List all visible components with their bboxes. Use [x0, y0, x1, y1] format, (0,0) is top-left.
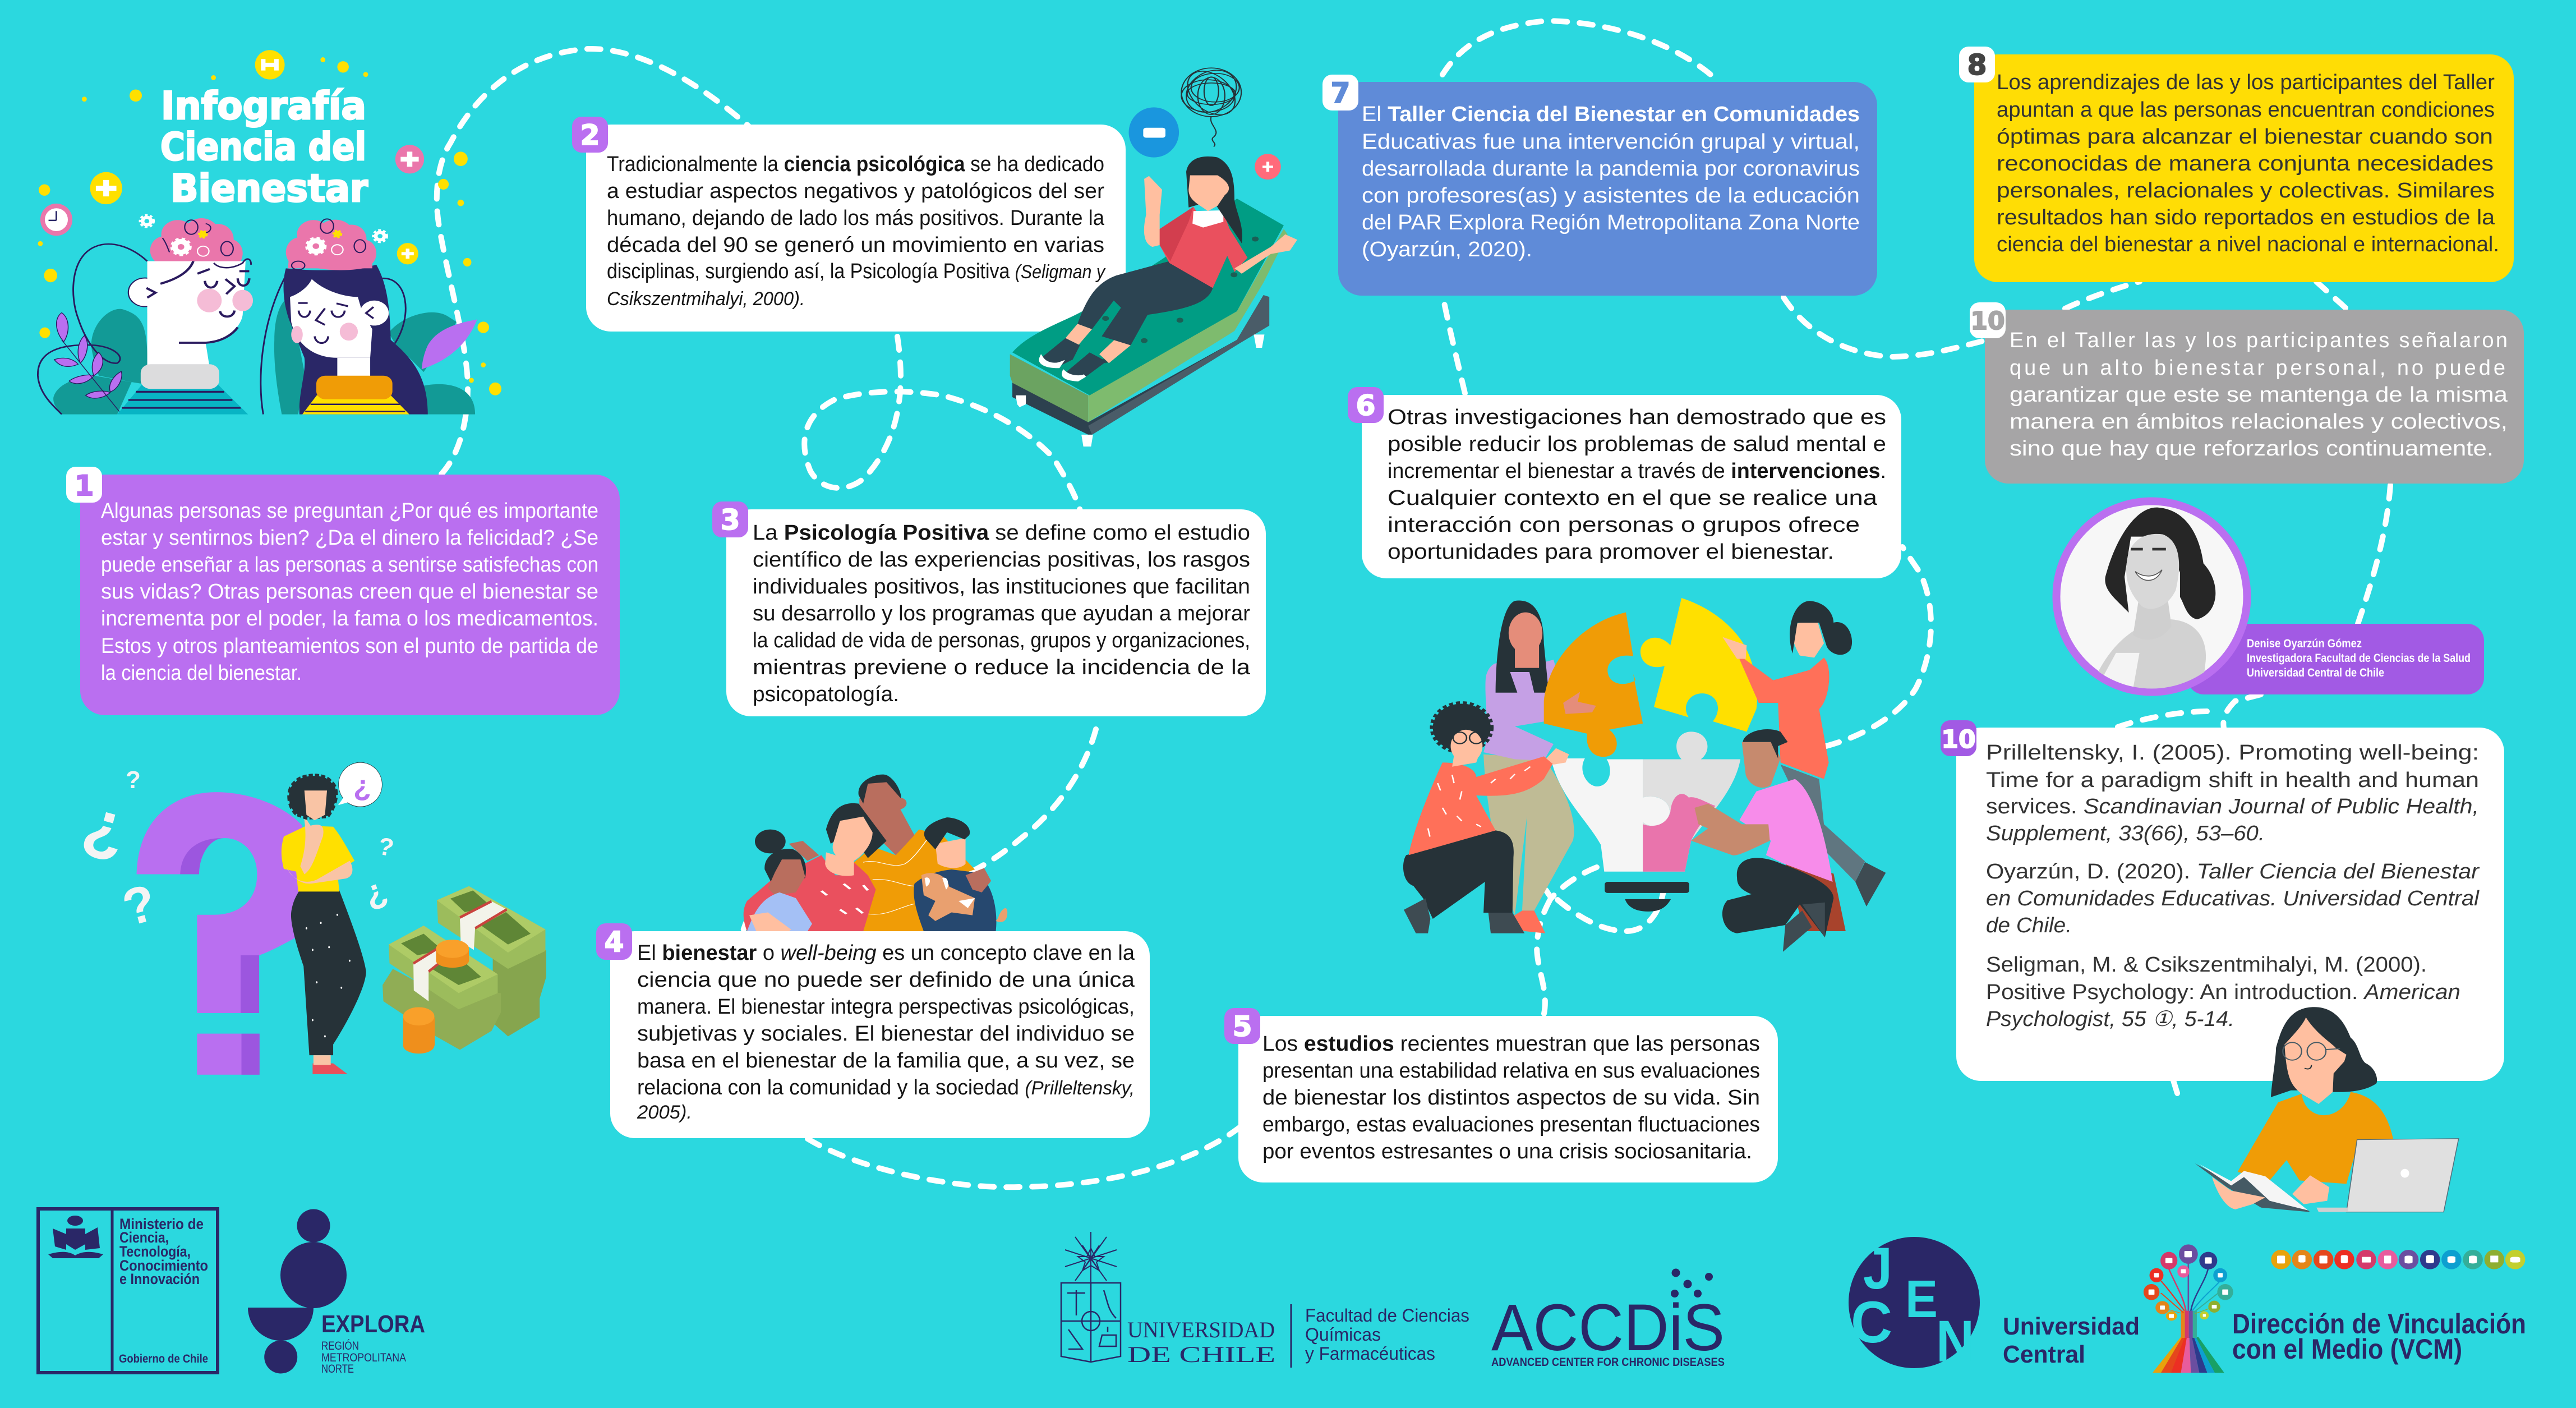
badge 1 — [66, 467, 102, 503]
text: references: Prilleltensky, I. (2005). Promoting well-being: — [1986, 741, 2479, 765]
panel 5: estudios — [1224, 1008, 1778, 1182]
white question marks: ? — [376, 832, 396, 862]
hand on orange piece — [1563, 692, 1596, 714]
reclining woman — [1041, 157, 1297, 380]
text: aprendizajes: personales, relacionales y colectivas. Similares — [1997, 179, 2495, 203]
purple plant — [54, 312, 122, 411]
icon: small yellow plus — [397, 243, 418, 264]
text: universidad de chile: UNIVERSIDAD — [1127, 1317, 1275, 1342]
text: taller: (Oyarzún, 2020). — [1362, 238, 1532, 261]
panel 7: taller — [1322, 75, 1877, 296]
text: facultad: Químicas — [1305, 1324, 1381, 1345]
white question marks: ¿ — [77, 784, 136, 867]
white question marks — [77, 766, 396, 937]
text: aprendizajes: ciencia del bienestar a nivel nacional e internacional. — [1997, 233, 2499, 256]
badge 7: 7 — [1331, 77, 1350, 109]
text: ciencia psicológica — [607, 153, 1106, 310]
UCEN letters — [1851, 1236, 1974, 1374]
white question marks: ? — [117, 874, 162, 937]
text: facultad: Facultad de Ciencias — [1305, 1305, 1469, 1326]
text: bienestar: ciencia que no puede ser definido de una única — [637, 968, 1135, 992]
text: psicología positiva — [753, 521, 1251, 706]
text: ciencia psicológica: década del 90 se generó un movimiento en varias — [607, 233, 1104, 257]
badge 8: 8 — [1967, 49, 1987, 81]
decorative yellow dots — [38, 57, 501, 395]
text: aprendizajes: apuntan a que las personas encuentran condiciones — [1997, 98, 2495, 122]
text: aprendizajes: Los aprendizajes de las y los participantes del Taller — [1997, 71, 2495, 94]
text: intro: incrementa por el poder, la fama o los medicamentos. — [101, 607, 598, 631]
text: ministerio: e Innovación — [119, 1271, 200, 1287]
badge 3: 3 — [721, 504, 740, 536]
text: bienestar personal: que un alto bienestar personal, no puede — [2010, 356, 2505, 380]
text: psicología positiva: La Psicología Positiva se define como el estudio — [753, 521, 1250, 545]
text: references: Positive Psychology: An introduction. American — [1986, 981, 2460, 1004]
panel 2: ciencia psicológica — [572, 117, 1126, 332]
speech bubble — [338, 762, 382, 807]
badge 7 — [1322, 75, 1358, 111]
badge 4: 4 — [605, 926, 624, 958]
woman figure — [284, 219, 428, 415]
text: references: Supplement, 33(66), 53–60. — [1986, 822, 2265, 845]
son with dog — [914, 817, 1007, 931]
title: Ciencia del — [160, 125, 366, 169]
mother — [744, 803, 887, 931]
woman in coral — [1722, 601, 1886, 907]
logo: Explora — [248, 1209, 425, 1375]
illustration: woman reading with laptop — [2195, 1007, 2459, 1212]
author tag — [2187, 624, 2484, 694]
logo: Universidad Central: Central — [2003, 1341, 2085, 1368]
text: universidad de chile — [1127, 1317, 1275, 1367]
logo: Universidad Central: Universidad — [2003, 1313, 2140, 1340]
text: ministerio: Ciencia, — [119, 1229, 169, 1246]
text: intervenciones: oportunidades para promover el bienestar. — [1388, 540, 1834, 564]
text: intervenciones: Otras investigaciones han demostrado que es — [1388, 406, 1886, 429]
crouching person right — [1691, 729, 1846, 952]
standing woman in purple — [1483, 601, 1595, 933]
coat of arms — [48, 1216, 103, 1258]
text: intro: Estos y otros planteamientos son el punto de partida de — [101, 634, 598, 658]
text: estudios — [1262, 1032, 1760, 1163]
text: aprendizajes: reconocidas de manera conjunta necesidades — [1997, 152, 2494, 176]
badge 9 labelled 10: 10 — [1970, 307, 2005, 335]
text: bienestar: basa en el bienestar de la familia que, a su vez, se — [637, 1049, 1135, 1073]
badge 8 — [1959, 47, 1995, 82]
text: ministerio: Conocimiento — [119, 1257, 208, 1274]
text: references: en Comunidades Educativas. Universidad Central — [1986, 887, 2480, 910]
text: psicología positiva: psicopatología. — [753, 683, 899, 706]
plus icon — [1255, 154, 1281, 180]
logo: Explora: REGIÓN — [321, 1340, 359, 1352]
text: ciencia psicológica: a estudiar aspectos negativos y patológicos del ser — [607, 180, 1104, 203]
icon: white gears — [141, 216, 386, 242]
text: psicología positiva: científico de las experiencias positivas, los rasgos — [753, 548, 1250, 572]
UCEN letters: E — [1905, 1269, 1938, 1329]
tree trunk fan — [2153, 1311, 2224, 1373]
author tag: Universidad Central de Chile — [2247, 666, 2384, 679]
big question mark — [136, 792, 302, 1075]
text: bienestar personal: sino que hay que reforzarlos continuamente. — [2010, 437, 2494, 461]
author tag: Denise Oyarzún Gómez — [2247, 637, 2362, 650]
text: references: Psychologist, 55 ①, 5-14. — [1986, 1007, 2234, 1031]
text: aprendizajes — [1997, 71, 2499, 256]
text: taller: con profesores(as) y asistentes de la educación — [1362, 184, 1860, 208]
icon: yellow badge top — [255, 50, 285, 80]
text: intro: puede enseñar a las personas a sentirse satisfechas con — [101, 553, 598, 577]
text: intervenciones: incrementar el bienestar a través de intervenciones. — [1388, 459, 1886, 483]
text: intro: la ciencia del bienestar. — [101, 661, 302, 685]
title: Bienestar — [170, 167, 368, 211]
logo: Universidad Central — [1849, 1236, 2140, 1374]
UCEN letters: C — [1851, 1290, 1892, 1355]
UCEN letters: J — [1863, 1236, 1892, 1301]
panel 8: aprendizajes — [1959, 47, 2514, 282]
badge 3 — [712, 501, 748, 537]
text: intro: sus vidas? Otras personas creen que el bienestar se — [101, 580, 598, 604]
text: taller: desarrollada durante la pandemia por coronavirus — [1362, 157, 1860, 181]
lightbulb base — [1605, 882, 1689, 912]
thin navy outline curves — [38, 244, 405, 415]
white question marks: ¿ — [358, 870, 391, 914]
text: bienestar — [637, 941, 1135, 1123]
scribble thought — [1176, 63, 1246, 146]
text: bienestar: subjetivas y sociales. El bienestar del individuo se — [637, 1022, 1135, 1046]
badge 6: 6 — [1356, 389, 1375, 422]
lightbulb left half — [1551, 758, 1670, 872]
badge 5: 5 — [1233, 1010, 1252, 1043]
panel 10: references — [1941, 720, 2504, 1081]
illustration: question mark, thinking person and money — [136, 762, 546, 1075]
text: references: de Chile. — [1986, 914, 2072, 937]
text: taller: El Taller Ciencia del Bienestar en Comunidades — [1362, 103, 1860, 126]
panel 9: bienestar personal — [1970, 302, 2524, 484]
panel 4: bienestar — [596, 923, 1150, 1138]
badge references 10: 10 — [1941, 725, 1976, 754]
icon: yellow plus — [90, 172, 122, 204]
text: estudios: presentan una estabilidad relativa en sus evaluaciones — [1262, 1059, 1760, 1083]
illustration: title figures with brains — [38, 50, 501, 415]
logo: VCM tree — [2144, 1244, 2525, 1373]
text: facultad — [1305, 1305, 1469, 1364]
panel 1: intro — [66, 467, 620, 715]
badge 5 — [1224, 1008, 1260, 1044]
dashed connector path — [437, 21, 2390, 1187]
text: intro — [101, 499, 598, 685]
logo: Universidad de Chile — [1061, 1232, 1469, 1368]
text: intervenciones: Cualquier contexto en el que se realice una — [1388, 486, 1878, 510]
text: references: Seligman, M. & Csikszentmihalyi, M. (2000). — [1986, 953, 2427, 977]
tree icon bubbles — [2144, 1244, 2233, 1320]
text: intervenciones: posible reducir los problemas de salud mental e — [1388, 432, 1886, 456]
text: bienestar: El bienestar o well-being es un concepto clave en la — [637, 941, 1135, 965]
text: universidad de chile: DE CHILE — [1127, 1342, 1275, 1367]
logo: ACCDiS: ADVANCED CENTER FOR CHRONIC DISEASES — [1491, 1356, 1725, 1369]
laptop — [2316, 1139, 2459, 1212]
text: psicología positiva: su desarrollo y los programas que ayudan a mejorar — [753, 602, 1250, 625]
text: bienestar: manera. El bienestar integra perspectivas psicológicas, — [637, 995, 1135, 1019]
tree branches — [2161, 1262, 2219, 1314]
text: references: services. Scandinavian Journal of Public Health, — [1986, 795, 2479, 818]
teal foliage — [53, 297, 475, 415]
shield — [1061, 1283, 1121, 1362]
text: estudios: Los estudios recientes muestran que las personas — [1262, 1032, 1760, 1056]
text: ciencia psicológica: Tradicionalmente la ciencia psicológica se ha dedicado — [607, 153, 1104, 176]
badge 2: 2 — [580, 119, 600, 151]
text: bienestar: 2005). — [637, 1102, 692, 1123]
text: intervenciones — [1388, 406, 1886, 564]
coins — [403, 940, 469, 1053]
reader hair — [2271, 1007, 2377, 1097]
text: aprendizajes: resultados han sido reportados en estudios de la — [1997, 206, 2495, 229]
badge 6 — [1348, 387, 1384, 423]
thinking person — [282, 776, 366, 1074]
illustration: family — [744, 775, 1007, 931]
badge 1: 1 — [75, 470, 94, 502]
minus icon — [1129, 107, 1179, 158]
money stacks — [383, 886, 546, 1050]
title: Infografía — [161, 84, 366, 128]
author tag: Investigadora Facultad de Ciencias de la Salud — [2247, 652, 2471, 665]
text: ciencia psicológica: Csikszentmihalyi, 2000). — [607, 288, 805, 310]
badge 2 — [572, 117, 608, 153]
couch — [1010, 199, 1288, 447]
text: facultad: y Farmacéuticas — [1305, 1343, 1435, 1364]
purple leaf — [422, 320, 477, 369]
star and rays — [1065, 1232, 1117, 1285]
father — [854, 775, 975, 931]
orange puzzle piece — [1544, 613, 1643, 757]
text: psicología positiva: la calidad de vida de personas, grupos y organizaciones, — [753, 629, 1250, 652]
text: Dirección de Vinculación: Dirección de Vinculación — [2232, 1308, 2526, 1340]
text: estudios: de bienestar los distintos aspectos de su vida. Sin — [1262, 1086, 1760, 1110]
text: Dirección de Vinculación: con el Medio (VCM) — [2232, 1333, 2462, 1365]
logo: Explora: NORTE — [321, 1363, 354, 1375]
text: intro: Algunas personas se preguntan ¿Por qué es importante — [101, 499, 598, 523]
text: ministerio: Ministerio de — [119, 1216, 204, 1232]
text: bienestar personal: En el Taller las y los participantes señalaron — [2010, 329, 2508, 352]
logo: Explora: METROPOLITANA — [321, 1351, 406, 1364]
badge 4 — [596, 923, 632, 960]
man figure — [117, 218, 253, 415]
panel 6: intervenciones — [1348, 387, 1901, 578]
text: ministerio: Tecnología, — [119, 1243, 191, 1260]
pink paint — [1643, 794, 1715, 872]
text: references: Oyarzún, D. (2020). Taller Ciencia del Bienestar — [1986, 860, 2480, 884]
text: estudios: embargo, estas evaluaciones presentan fluctuaciones — [1262, 1113, 1760, 1136]
illustration: people building puzzle lightbulb — [1403, 598, 1886, 952]
text: bienestar personal: garantizar que este se mantenga de la misma — [2010, 383, 2508, 407]
panel 3: psicología positiva — [712, 501, 1266, 716]
text: bienestar personal — [2010, 329, 2508, 461]
title — [160, 84, 368, 211]
text: ciencia psicológica: disciplinas, surgiendo así, la Psicología Positiva (Seligman y — [607, 260, 1106, 283]
UCEN letters: N — [1936, 1309, 1974, 1374]
text: ministerio — [119, 1216, 208, 1365]
author photo — [2056, 501, 2247, 698]
text: ciencia psicológica: humano, dejando de lado los más positivos. Durante la — [607, 206, 1105, 230]
reader body — [2238, 1092, 2393, 1184]
text: intro: estar y sentirnos bien? ¿Da el dinero la felicidad? ¿Se — [101, 526, 598, 550]
lightbulb right half — [1643, 731, 1740, 872]
text: bienestar personal: manera en ámbitos relacionales y colectivos, — [2010, 410, 2508, 434]
crouching person left — [1403, 703, 1569, 933]
icon: pink plus — [395, 145, 424, 173]
open book and hands — [2195, 1163, 2329, 1212]
text: ministerio: Gobierno de Chile — [119, 1352, 208, 1365]
text: taller — [1362, 103, 1860, 261]
text: psicología positiva: mientras previene o reduce la incidencia de la — [753, 656, 1251, 679]
white question marks: ? — [126, 766, 141, 794]
text: psicología positiva: individuales positivos, las instituciones que facilitan — [753, 575, 1250, 599]
logo: Explora: EXPLORA — [321, 1310, 425, 1338]
text: taller: del PAR Explora Región Metropolitana Zona Norte — [1362, 211, 1860, 234]
text: aprendizajes: óptimas para alcanzar el bienestar cuando son — [1997, 125, 2493, 149]
icon row — [2271, 1250, 2525, 1269]
text: Dirección de Vinculación — [2232, 1308, 2526, 1365]
icon: clock — [40, 204, 72, 236]
daughter — [747, 830, 812, 931]
text: estudios: por eventos estresantes o una crisis sociosanitaria. — [1262, 1140, 1752, 1163]
text: intervenciones: interacción con personas o grupos ofrece — [1388, 513, 1860, 537]
text: references — [1986, 741, 2480, 1031]
yellow puzzle piece — [1640, 598, 1757, 731]
illustration: woman on couch — [1010, 63, 1297, 447]
text: bienestar: relaciona con la comunidad y la sociedad (Prilleltensky, — [637, 1076, 1135, 1099]
white question marks: ¿ — [353, 770, 371, 802]
text: references: Time for a paradigm shift in health and human — [1986, 769, 2479, 792]
logo: Ministerio de Ciencia — [38, 1209, 218, 1373]
reader face — [2283, 1017, 2347, 1104]
logo: ACCDiS: ACCDiS — [1491, 1291, 1725, 1365]
text: taller: Educativas fue una intervención grupal y virtual, — [1362, 130, 1860, 154]
